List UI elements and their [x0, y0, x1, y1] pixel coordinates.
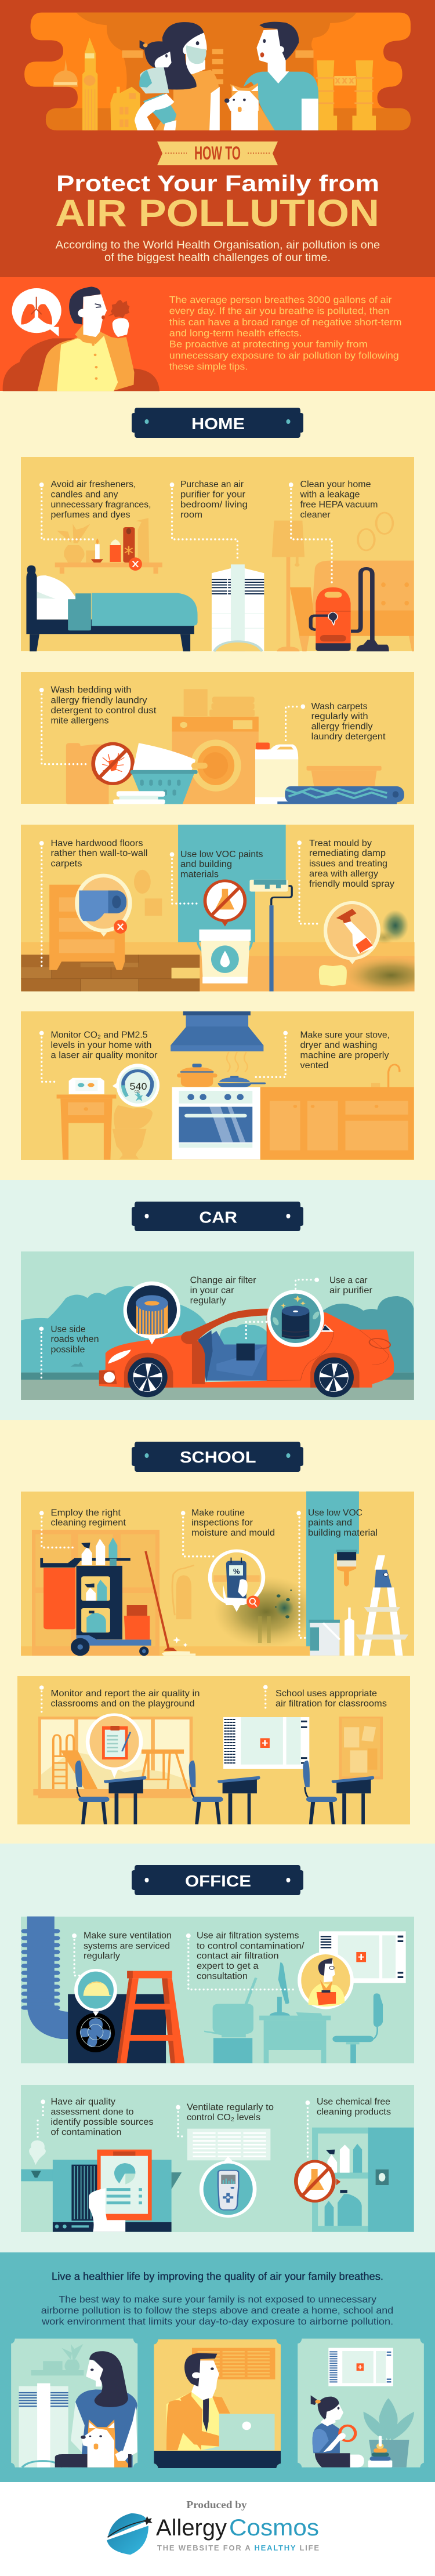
panel: flooring paint and mould tips	[21, 825, 435, 993]
icon: red car	[99, 1309, 394, 1397]
tip: car air purifier: Use a car	[329, 1275, 368, 1285]
icon: floor lamp	[272, 521, 304, 651]
tip: stove venting: Make sure your stove,	[300, 1030, 390, 1040]
tip: air quality assessment: of contamination	[51, 2127, 122, 2137]
panel: kitchen tips	[21, 1011, 414, 1160]
intro text: every day. If the air you breathe is polluted, then	[169, 306, 390, 317]
tip: low VOC paints: and building	[180, 859, 232, 869]
tip: stove venting: vented	[300, 1061, 328, 1071]
school section background	[0, 1420, 435, 1844]
intro text: and long-term health effects.	[169, 328, 302, 339]
subtitle: of the biggest health challenges of our time.	[104, 252, 331, 264]
icon: desk and chair 1	[75, 1761, 146, 1824]
icon: window vent unit	[319, 1931, 406, 1983]
icon: candle	[91, 538, 103, 563]
tip: low VOC paints at school: paints and	[308, 1518, 352, 1528]
closing illustrations	[11, 2339, 424, 2468]
tip: routine inspections: moisture and mould	[191, 1528, 275, 1538]
home section background	[0, 391, 435, 1180]
heading badge: CAR	[132, 1202, 303, 1231]
dotted leader lines	[39, 482, 332, 583]
tip: monitor CO2: levels in your home with	[51, 1040, 152, 1050]
tip: HEPA vacuum: cleaner	[300, 510, 331, 520]
child	[135, 40, 176, 130]
icon: sofa	[290, 561, 414, 651]
tip: HEPA vacuum: free HEPA vacuum	[300, 500, 378, 510]
tip: ventilation systems: Make sure ventilation	[84, 1931, 172, 1941]
tip: HEPA vacuum	[299, 480, 378, 520]
intro text	[169, 295, 402, 372]
logo: Allergy Cosmos globe	[107, 2513, 153, 2555]
icon: carpet bubble	[75, 874, 132, 937]
icon: pot and pan	[177, 1064, 266, 1087]
icon: spray bubble	[325, 902, 379, 964]
card: mother and dog at home	[11, 2339, 137, 2468]
tip: treat mould: remediating damp	[309, 848, 386, 858]
heading badge: HOME	[132, 408, 303, 438]
icon: townhouse	[110, 87, 140, 130]
heading badge: OFFICE: OFFICE	[185, 1872, 251, 1890]
kitchen illustration	[39, 1011, 414, 1160]
icon: cross mark	[129, 557, 142, 571]
tip: wash bedding: Wash bedding with	[51, 685, 131, 695]
tip: treat mould: area with allergy	[309, 869, 378, 879]
closing paragraph: work environment that limits your day-to-day exposure to airborne pollution.	[41, 2316, 393, 2327]
tip: school air filtration: air filtration for classrooms	[276, 1699, 387, 1708]
icon: air quality monitor	[69, 1078, 104, 1094]
logo wordmark	[156, 2515, 319, 2552]
tip: low VOC paints	[180, 850, 263, 880]
tip: monitor air quality	[51, 1689, 200, 1708]
tip: side roads	[51, 1325, 99, 1355]
icon: no VOC sign	[205, 881, 245, 927]
tip: air filtration systems: consultation	[197, 1971, 248, 1981]
tip: wash carpets: allergy friendly	[311, 721, 373, 732]
tip: hardwood floors: carpets	[51, 859, 82, 869]
tip: stove venting	[300, 1030, 390, 1071]
tip: purchase an air purifier	[180, 480, 248, 520]
logo wordmark: THE WEBSITE FOR A HEALTHY LIFE	[157, 2544, 319, 2552]
dotted leader lines	[39, 1278, 319, 1378]
tip: low VOC paints: Use low VOC paints	[180, 850, 263, 859]
meter reading: %	[233, 1567, 240, 1576]
tip: purchase an air purifier: room	[180, 510, 202, 520]
icon: classroom window and playground	[33, 1717, 195, 1798]
icon: sponge	[319, 965, 347, 986]
tip: side roads: possible	[51, 1345, 85, 1355]
banner: how to	[157, 142, 278, 165]
dotted leader lines	[39, 1511, 308, 1638]
icon: cooker hood	[171, 1011, 263, 1051]
icon: CO2 meter bubble	[201, 2156, 255, 2216]
icon: office silhouette desk and monitor	[259, 1962, 331, 2063]
icon: air handling unit	[68, 1994, 166, 2063]
tip: wash bedding	[51, 685, 157, 726]
tip: chemical free cleaning: Use chemical free	[317, 2097, 390, 2107]
dotted leader lines	[39, 1031, 288, 1082]
dotted leader lines	[39, 688, 305, 764]
tip: chemical free cleaning: cleaning products	[317, 2107, 391, 2117]
office assessment illustration	[21, 2099, 414, 2232]
icon: lungs speech bubble	[12, 288, 61, 336]
tip: wash bedding: detergent to control dust	[51, 706, 157, 716]
icon: stove	[172, 1087, 260, 1160]
icon: rolled carpet	[277, 786, 404, 804]
tip: cleaning regiment	[51, 1508, 126, 1528]
tip: treat mould	[309, 839, 394, 889]
intro band background	[0, 277, 435, 391]
icon: paint can and tube	[309, 1608, 354, 1656]
icon: ventilation duct	[24, 1917, 68, 2039]
tip: purchase an air purifier: bedroom/ living	[180, 500, 248, 510]
heading badge: SCHOOL: SCHOOL	[180, 1448, 256, 1466]
icon: air purifier	[212, 564, 264, 651]
icon: paint bucket	[197, 930, 252, 984]
wood floor	[21, 955, 200, 991]
icon: dresser	[49, 885, 125, 970]
tip: air quality assessment: identify possible sources	[51, 2117, 154, 2127]
icon: no chemicals sign	[296, 2161, 340, 2201]
icon: washing machine	[172, 717, 259, 804]
bedroom illustration	[26, 482, 414, 651]
tip: wash carpets: Wash carpets	[311, 702, 368, 712]
icon: air handling cabinet	[53, 2160, 182, 2232]
icon: pillow and basket	[113, 743, 208, 804]
icon: paint brush	[336, 1550, 357, 1586]
tip: treat mould: Treat mould by	[309, 839, 372, 848]
tip: ventilate regularly	[187, 2102, 274, 2123]
tip: HEPA vacuum: Clean your home	[300, 480, 371, 489]
laundry illustration	[39, 688, 404, 804]
icon: clipboard report	[89, 2150, 152, 2232]
car section background	[0, 1180, 435, 1420]
tip: air filtration systems: to control contamination/	[197, 1941, 304, 1951]
office section background	[0, 1844, 435, 2252]
tip: low VOC paints at school: Use low VOC	[308, 1508, 362, 1518]
icon: no dust mites	[93, 743, 133, 783]
icon: hard hat bubble	[76, 1970, 115, 2016]
tip: stove venting: dryer and washing	[300, 1040, 377, 1050]
subtitle: According to the World Health Organisation, air pollution is one	[56, 239, 380, 252]
heading badge: CAR: CAR	[199, 1209, 237, 1227]
tip: low VOC paints: materials	[180, 870, 219, 880]
icon: smoke from pipe	[21, 2140, 55, 2181]
icon: Big Ben	[82, 38, 97, 130]
tip: change air filter: in your car	[190, 1286, 234, 1296]
tip: chemical free cleaning	[317, 2097, 391, 2117]
icon: detergent jug	[255, 742, 298, 804]
intro text: this can have a broad range of negative short-term	[169, 317, 402, 328]
heading badge: HOME: HOME	[191, 415, 245, 433]
icon: orange ladder	[117, 1971, 184, 2063]
tip: routine inspections: Make routine	[191, 1508, 245, 1518]
tip: avoid air fresheners: Avoid air fresheners,	[51, 480, 136, 489]
tip: wash bedding: allergy friendly laundry	[51, 696, 147, 705]
closing paragraph	[41, 2294, 393, 2327]
icon: shelf	[55, 563, 162, 574]
icon: side table	[57, 1094, 116, 1160]
dotted leader lines	[72, 1933, 297, 1990]
gauge value: CO₂	[135, 1090, 140, 1094]
tip: purchase an air purifier: Purchase an air	[180, 480, 244, 489]
tip: wash carpets	[311, 702, 386, 742]
tip: monitor air quality: Monitor and report the air quality in	[51, 1689, 200, 1699]
tip: wash bedding: mite allergens	[51, 716, 109, 726]
icon: dome	[53, 59, 78, 87]
intro text: these simple tips.	[169, 362, 248, 372]
card: man with laptop	[154, 2339, 281, 2468]
icon: consultant bubble	[299, 1953, 352, 2008]
mould patch	[213, 1576, 319, 1648]
tip: air filtration systems: expert to get a	[197, 1961, 259, 1971]
painted wall	[178, 825, 286, 942]
tip: treat mould: friendly mould spray	[309, 879, 394, 889]
icon: desk and chair 2	[189, 1761, 260, 1824]
panel: car tips	[21, 1251, 414, 1400]
tip: monitor air quality: classrooms and on the playground	[51, 1699, 195, 1708]
tip: air filtration systems: Use air filtration systems	[197, 1931, 299, 1941]
tip: car air purifier	[329, 1275, 372, 1296]
icon: desk and chair 3	[303, 1761, 374, 1824]
icon: office silhouette chair	[332, 1993, 383, 2063]
tip: routine inspections	[191, 1508, 275, 1538]
tip: wash carpets: regularly with	[311, 712, 368, 721]
icon: kitchen counter	[260, 1065, 414, 1160]
tip: monitor CO2: Monitor CO₂ and PM2.5	[51, 1030, 147, 1040]
panel: school cleaning tips	[21, 1492, 414, 1656]
tip: wash carpets: laundry detergent	[311, 732, 386, 742]
icon: window vent unit	[223, 1717, 309, 1769]
icon: fire extinguisher	[172, 1565, 194, 1619]
tip: ventilation systems: systems are serviced	[84, 1941, 170, 1951]
tip: air filtration systems	[197, 1931, 304, 1981]
tip: ventilation systems	[84, 1931, 172, 1961]
tip: HEPA vacuum: with a leakage	[299, 490, 360, 500]
icon: clipboard bubble	[88, 1715, 141, 1779]
icon: spray can	[123, 527, 135, 563]
icon: jerry can	[66, 743, 108, 804]
tip: routine inspections: inspections for	[191, 1518, 253, 1528]
title	[55, 172, 379, 234]
icon: cleaning trolley	[40, 1537, 151, 1656]
tip: hardwood floors	[51, 839, 147, 869]
icon: air filter bubble	[124, 1282, 180, 1344]
tip: side roads: roads when	[51, 1334, 99, 1344]
icon: cleaning cupboard	[312, 2128, 414, 2232]
icon: fragrance bottle	[110, 539, 121, 562]
icon: stacking rings toy	[368, 2436, 392, 2468]
icon: plant vase	[113, 1105, 153, 1159]
banner: how to: HOW TO	[194, 143, 241, 164]
icon: bed	[26, 565, 198, 651]
subtitle	[56, 239, 380, 264]
tip: ventilate regularly: control CO₂ levels	[187, 2113, 260, 2123]
tip: hardwood floors: rather then wall-to-wall	[51, 848, 147, 858]
dotted leader lines	[39, 840, 318, 966]
tip: avoid air fresheners: perfumes and dyes	[51, 510, 130, 520]
hero illustration: family and London skyline	[24, 13, 411, 130]
dog	[224, 83, 275, 130]
panel: laundry tips	[21, 672, 414, 804]
tip: low VOC paints at school: building material	[308, 1528, 378, 1538]
tip: side roads: Use side	[51, 1325, 86, 1334]
intro text: Be proactive at protecting your family from	[169, 339, 368, 350]
icon: lockers	[32, 1530, 160, 1656]
tip: cleaning regiment: Employ the right	[51, 1508, 121, 1518]
tip: cleaning regiment: cleaning regiment	[51, 1518, 126, 1528]
card: child playing	[298, 2339, 424, 2468]
icon: car wheels	[128, 1358, 354, 1397]
closing headline: Live a healthier life by improving the quality of air your family breathes.	[52, 2271, 383, 2283]
tip: air quality assessment: Have air quality	[51, 2097, 115, 2107]
intro text: unnecessary exposure to air pollution by following	[169, 350, 399, 361]
coughing man illustration	[3, 286, 160, 391]
tip: low VOC paints at school	[308, 1508, 378, 1538]
flooring paint and mould illustration	[21, 825, 435, 993]
tip: monitor CO2: a laser air quality monitor	[51, 1051, 158, 1061]
title: Protect Your Family from	[56, 172, 379, 196]
icon: mop	[146, 1551, 195, 1656]
tip: avoid air fresheners	[51, 480, 151, 520]
tip: avoid air fresheners: unnecessary fragrances,	[51, 500, 151, 510]
mould patch	[349, 910, 415, 992]
icon: moisture meter bubble	[210, 1551, 263, 1612]
tip: air filtration systems: contact air filtration	[197, 1951, 279, 1961]
heading badge: SCHOOL	[132, 1442, 303, 1472]
header background	[0, 0, 435, 277]
heading badge: OFFICE	[132, 1865, 303, 1895]
intro text: The average person breathes 3000 gallons of air	[169, 295, 392, 306]
tip: stove venting: machine are properly	[300, 1051, 389, 1061]
panel: bedroom tips	[21, 457, 414, 651]
dotted leader lines	[38, 2099, 310, 2158]
icon: vacuum cleaner	[311, 569, 389, 651]
gauge value: 540	[130, 1081, 147, 1092]
tip: change air filter: Change air filter	[190, 1275, 256, 1285]
school cleaning illustration	[21, 1492, 408, 1656]
tip: air quality assessment	[51, 2097, 154, 2137]
icon: round mirrors	[358, 513, 393, 550]
icon: paint roller	[249, 880, 292, 991]
footer: produced by: Produced by	[186, 2499, 247, 2510]
tip: avoid air fresheners: candles and any	[51, 490, 118, 500]
tip: hardwood floors: Have hardwood floors	[51, 839, 143, 848]
panel: classroom tips	[17, 1676, 410, 1824]
woman with mask	[155, 22, 220, 130]
painted wall	[306, 1492, 359, 1646]
tip: air quality assessment: assessment done to	[51, 2107, 133, 2117]
man	[244, 22, 318, 130]
icon: notice board	[339, 1717, 383, 1779]
car illustration	[21, 1278, 414, 1400]
tip: monitor CO2	[51, 1030, 158, 1061]
tip: school air filtration	[276, 1689, 387, 1708]
tip: ventilation systems: regularly	[84, 1951, 120, 1961]
logo wordmark: Allergy	[156, 2515, 227, 2541]
tip: car air purifier: air purifier	[329, 1286, 372, 1296]
dotted leader lines	[39, 1685, 268, 1715]
closing section background	[0, 2252, 435, 2482]
icon: office silhouette printer	[204, 1978, 258, 2063]
icon: child figure	[311, 2395, 364, 2468]
icon: potted plant	[364, 2398, 414, 2468]
tip: change air filter	[190, 1275, 256, 1306]
classroom illustration	[33, 1685, 383, 1824]
closing paragraph: The best way to make sure your family is not exposed to unnecessary	[59, 2294, 377, 2305]
icon: wash bowl	[307, 766, 382, 786]
tip: change air filter: regularly	[190, 1296, 226, 1306]
panel: office ventilation tips	[21, 1917, 414, 2063]
closing paragraph: airborne pollution is to follow the steps above and create a home, school and	[41, 2305, 393, 2316]
icon: step ladder	[356, 1555, 408, 1656]
panel: office assessment tips	[21, 2085, 414, 2232]
icon: car purifier bubble	[267, 1290, 334, 1347]
icon: Tower Bridge	[316, 60, 376, 130]
icon: CO2 gauge bubble	[113, 1064, 160, 1107]
tip: treat mould: issues and treating	[309, 859, 387, 869]
tip: school air filtration: School uses appropriate	[276, 1689, 377, 1699]
office ventilation illustration	[24, 1917, 406, 2063]
tip: purchase an air purifier: purifier for your	[180, 490, 245, 500]
tip: ventilate regularly: Ventilate regularly to	[187, 2102, 274, 2112]
logo wordmark: Cosmos	[229, 2515, 319, 2541]
title: AIR POLLUTION	[55, 191, 379, 234]
footer background	[0, 2482, 435, 2576]
icon: wall vent grille	[187, 2129, 270, 2160]
icon: vase plant	[57, 524, 90, 563]
